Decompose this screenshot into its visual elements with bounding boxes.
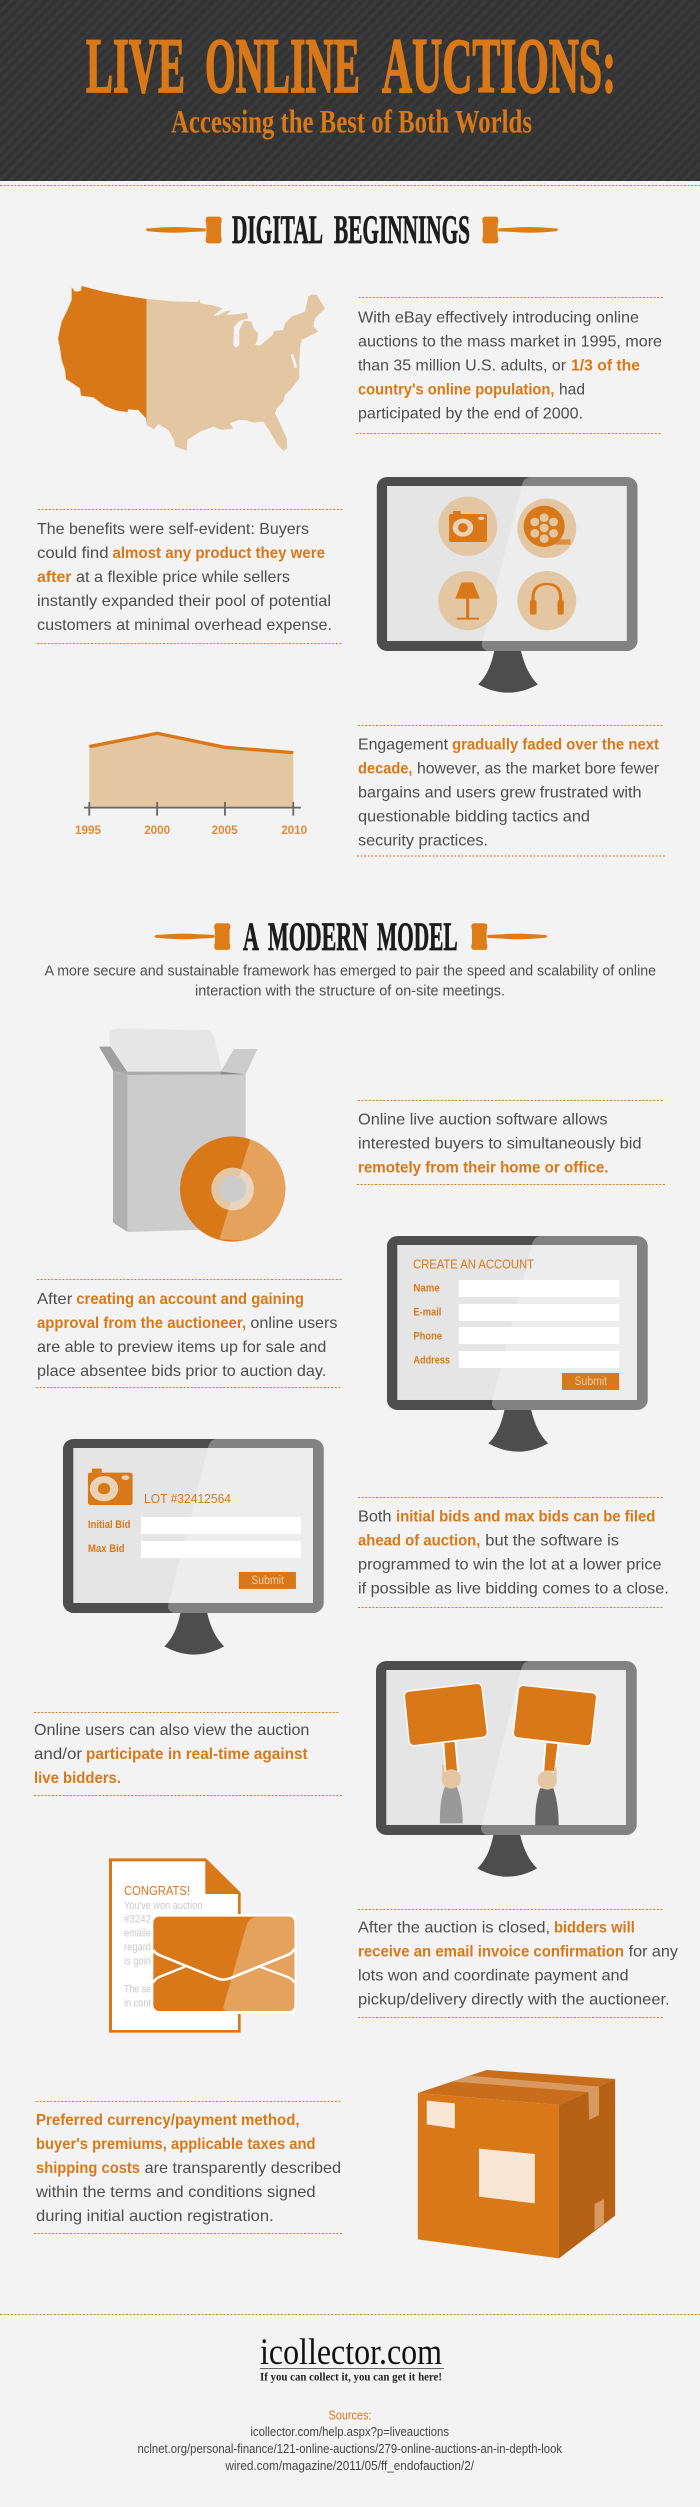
- text block: create an account: [36, 1280, 342, 1388]
- text block: ebay introduction: [356, 298, 664, 434]
- text block: email invoice: bidders will: [554, 1919, 635, 1936]
- text block: ebay introduction: country's online population,: [358, 381, 554, 398]
- icon: congrats letter and envelope: [109, 1858, 297, 2033]
- text block: ebay introduction: 1/3 of the: [571, 357, 640, 374]
- text block: create an account: creating an account and gaining: [76, 1291, 304, 1308]
- logo: icollector.com: icollector.com: [260, 2332, 442, 2373]
- icon: congrats letter and envelope: You've won auction: [124, 1900, 202, 1912]
- monitor: create an account form: E-mail: [413, 1306, 441, 1318]
- text block: engagement faded: gradually faded over the next: [452, 736, 660, 753]
- monitor: create an account form: [387, 1236, 648, 1452]
- sources: nclnet.org/personal-finance/121-online-auctions/279-online-auctions-an-in-depth-look: [138, 2442, 563, 2456]
- text block: terms and conditions: during initial auction registration.: [36, 2208, 274, 2225]
- text block: email invoice: After the auction is closed,: [358, 1919, 550, 1936]
- text block: terms and conditions: shipping costs: [36, 2160, 140, 2177]
- logo: icollector.com: If you can collect it, you can get it here!: [260, 2370, 442, 2384]
- heading: a modern model: [154, 914, 547, 959]
- icon: envelope: [151, 1914, 297, 2014]
- subtitle: Accessing the Best of Both Worlds: [171, 105, 532, 141]
- monitor: lot bid form: [63, 1439, 324, 1655]
- text block: ebay introduction: had: [559, 381, 585, 398]
- icon: film reel: [517, 499, 576, 558]
- monitor: product icons: [377, 477, 637, 693]
- intro text: modern model: A more secure and sustainable framework has emerged to pair the speed and scalability of online: [45, 963, 656, 979]
- text block: create an account: place absentee bids prior to auction day.: [37, 1363, 326, 1380]
- text block: terms and conditions: Preferred currency/payment method,: [36, 2112, 300, 2129]
- text block: initial and max bids: [358, 1498, 669, 1608]
- heading: digital beginnings: BEGINNINGS: [334, 207, 470, 252]
- icon: camera: [88, 1469, 133, 1505]
- icon: right gavel: [471, 923, 547, 950]
- text block: ebay introduction: than 35 million U.S. adults, or: [358, 357, 567, 374]
- text block: engagement faded: bargains and users grew frustrated with: [358, 784, 642, 801]
- text block: ebay introduction: participated by the end of 2000.: [358, 405, 583, 422]
- text block: benefits: could find: [37, 545, 108, 562]
- text block: engagement faded: [357, 726, 666, 856]
- icon: software box and disc: [99, 1028, 285, 1242]
- text block: create an account: approval from the auctioneer,: [37, 1315, 246, 1332]
- sources: icollector.com/help.aspx?p=liveauctions: [250, 2425, 449, 2439]
- icon: left gavel: [146, 217, 222, 243]
- text block: benefits: instantly expanded their pool of potential: [37, 593, 331, 610]
- icon: congrats letter and envelope: is goin: [124, 1956, 151, 1968]
- text block: real-time participation: Online users can also view the auction: [34, 1722, 309, 1739]
- header banner: [0, 0, 700, 181]
- text block: benefits: The benefits were self-evident: Buyers: [37, 521, 309, 538]
- icon: right gavel: [482, 217, 558, 243]
- icon: lamp: [438, 571, 497, 630]
- text block: engagement faded: decade,: [358, 760, 412, 777]
- text block: create an account: online users: [250, 1315, 338, 1332]
- text block: benefits: at a flexible price while sellers: [76, 569, 290, 586]
- text block: initial and max bids: initial bids and max bids can be filed: [396, 1509, 655, 1526]
- title: ONLINE: [205, 22, 360, 109]
- text block: email invoice: for any: [629, 1943, 678, 1960]
- text block: email invoice: pickup/delivery directly with the auctioneer.: [358, 1991, 670, 2008]
- sources: Sources:: [329, 2408, 371, 2422]
- text block: real-time participation: [34, 1712, 343, 1796]
- text block: email invoice: receive an email invoice confirmation: [358, 1943, 624, 1960]
- text block: engagement faded: security practices.: [358, 832, 488, 849]
- area chart: engagement 1995 to 2010: [75, 733, 308, 837]
- text block: initial and max bids: ahead of auction,: [358, 1533, 480, 1550]
- title: LIVE: [86, 22, 185, 109]
- monitor: bidder paddles: [376, 1661, 637, 1877]
- heading: a modern model: MODEL: [377, 914, 458, 959]
- icon: left paddle: [409, 1688, 483, 1823]
- area chart: engagement 1995 to 2010: 2005: [212, 823, 238, 837]
- text block: benefits: almost any product they were: [112, 545, 325, 562]
- text block: initial and max bids: if possible as live bidding comes to a close.: [358, 1581, 669, 1598]
- monitor: create an account form: Phone: [413, 1330, 442, 1342]
- text block: initial and max bids: programmed to win the lot at a lower price: [358, 1557, 662, 1574]
- text block: remote bidding: [357, 1100, 666, 1184]
- area chart: engagement 1995 to 2010: 2000: [144, 823, 171, 837]
- intro text: modern model: [45, 963, 656, 999]
- text block: create an account: are able to preview items up for sale and: [37, 1339, 326, 1356]
- icon: shipping package: [418, 2070, 615, 2258]
- icon: camera: [438, 497, 497, 556]
- icon: congrats letter and envelope: regard: [124, 1942, 151, 1954]
- text block: real-time participation: and/or: [34, 1746, 83, 1763]
- icon: congrats letter and envelope: emaile: [124, 1928, 151, 1940]
- text block: terms and conditions: [34, 2102, 343, 2234]
- text block: terms and conditions: are transparently described: [145, 2160, 341, 2177]
- monitor: create an account form: Name: [413, 1282, 440, 1294]
- text block: benefits: after: [37, 569, 72, 586]
- text block: engagement faded: however, as the market bore fewer: [417, 760, 660, 777]
- text block: terms and conditions: within the terms and conditions signed: [35, 2184, 316, 2201]
- text block: initial and max bids: but the software is: [485, 1533, 619, 1550]
- area chart: engagement 1995 to 2010: 1995: [75, 823, 101, 837]
- text block: ebay introduction: auctions to the mass market in 1995, more: [358, 333, 662, 350]
- monitor: lot bid form: Max Bid: [88, 1543, 125, 1555]
- text block: create an account: After: [37, 1291, 73, 1308]
- sources: wired.com/magazine/2011/05/ff_endofauction/2/: [224, 2459, 474, 2473]
- text block: remote bidding: Online live auction software allows: [358, 1111, 608, 1128]
- monitor: lot bid form: LOT #32412564: [144, 1491, 231, 1506]
- area chart: engagement 1995 to 2010: 2010: [281, 823, 308, 837]
- icon: left gavel: [154, 923, 230, 950]
- text block: remote bidding: remotely from their home or office.: [358, 1159, 608, 1176]
- icon: congrats letter and envelope: The se: [124, 1984, 151, 1996]
- monitor: lot bid form: Submit: [251, 1575, 285, 1587]
- text block: engagement faded: questionable bidding tactics and: [358, 808, 590, 825]
- icon: right paddle: [518, 1690, 592, 1825]
- text block: real-time participation: live bidders.: [34, 1770, 121, 1787]
- icon: congrats letter and envelope: #3242: [124, 1914, 151, 1926]
- icon: headphones: [517, 571, 576, 630]
- text block: remote bidding: interested buyers to simultaneously bid: [358, 1135, 642, 1152]
- text block: ebay introduction: With eBay effectively introducing online: [358, 309, 639, 326]
- monitor: lot bid form: Initial Bid: [88, 1519, 130, 1531]
- map: united states: [58, 286, 325, 451]
- text block: benefits: [37, 510, 343, 644]
- intro text: modern model: interaction with the structure of on-site meetings.: [195, 983, 505, 999]
- heading: a modern model: MODERN: [268, 914, 368, 959]
- text block: initial and max bids: Both: [358, 1509, 392, 1526]
- sources: [138, 2408, 563, 2473]
- icon: congrats letter and envelope: in cont: [124, 1998, 151, 2010]
- monitor: create an account form: Submit: [575, 1376, 608, 1388]
- text block: engagement faded: Engagement: [358, 736, 449, 753]
- monitor: create an account form: Address: [413, 1354, 450, 1366]
- heading: digital beginnings: DIGITAL: [232, 207, 323, 252]
- title: [86, 22, 616, 109]
- heading: digital beginnings: [146, 207, 558, 252]
- text block: benefits: customers at minimal overhead expense.: [37, 617, 332, 634]
- icon: congrats letter and envelope: CONGRATS!: [124, 1883, 190, 1898]
- text block: email invoice: lots won and coordinate payment and: [358, 1967, 629, 1984]
- monitor: create an account form: CREATE AN ACCOUNT: [413, 1256, 534, 1271]
- text block: email invoice: [358, 1910, 678, 2018]
- heading: a modern model: A: [243, 914, 259, 959]
- text block: terms and conditions: buyer's premiums, applicable taxes and: [36, 2136, 316, 2153]
- text block: real-time participation: participate in real-time against: [86, 1746, 308, 1763]
